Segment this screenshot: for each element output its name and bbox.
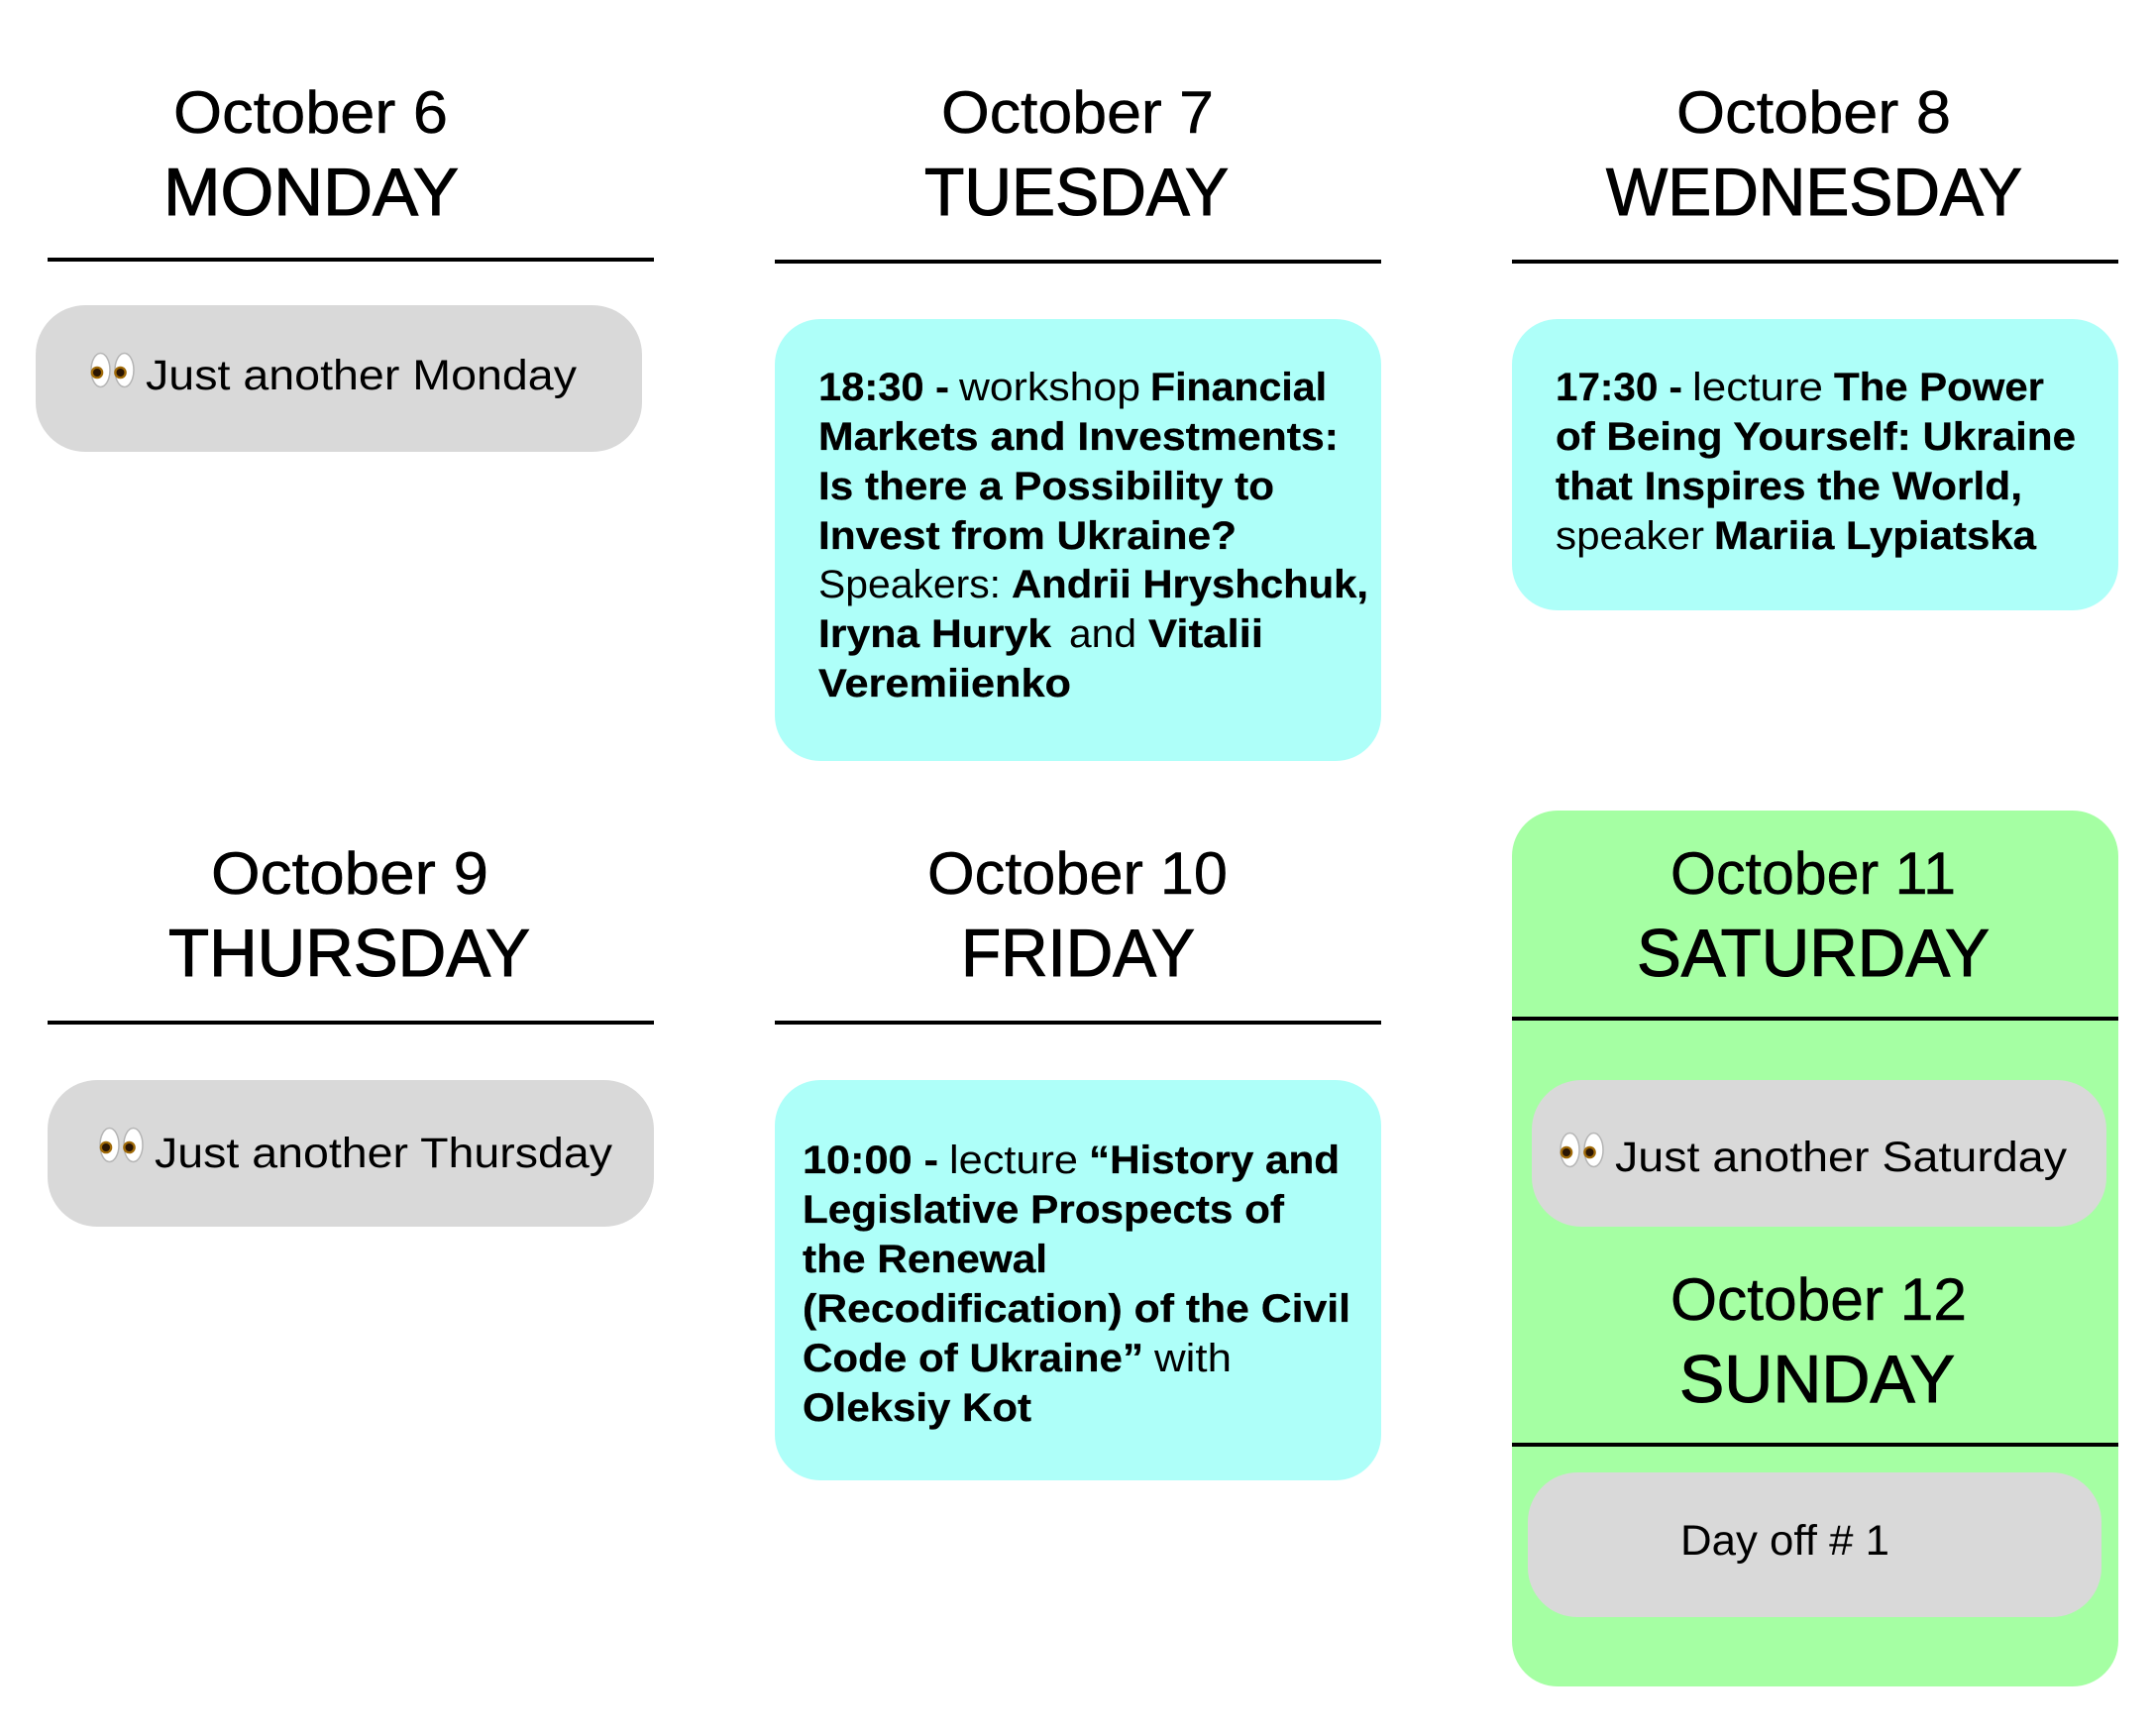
event card: workshop Financial Markets: Vitalii [1148, 612, 1263, 656]
icon: eyes [100, 1128, 143, 1161]
heading: October 7 Tuesday [924, 79, 1229, 230]
event card: lecture The Power of Being Yourself: lecture [1692, 366, 1823, 409]
event card: workshop Financial Markets: Invest from Ukraine? [818, 514, 1237, 558]
event card: workshop Financial Markets: Veremiienko [818, 662, 1071, 705]
event card: workshop Financial Markets: Andrii Hryshchuk, [1012, 563, 1368, 606]
heading: October 9 Thursday [168, 840, 530, 991]
heading: October 12 Sunday [1670, 1266, 1967, 1417]
pill: Just another Saturday: Just another Saturday [1615, 1134, 2068, 1181]
event card: lecture History and Legislative Prospects: (Recodification) of the Civil [803, 1287, 1350, 1331]
event card: lecture The Power of Being Yourself: Mariia Lypiatska [1714, 514, 2037, 558]
pill: Just another Monday: Just another Monday [146, 352, 578, 399]
heading: October 10 Friday: October 10 [927, 840, 1228, 907]
panel: weekend [1512, 811, 2118, 1686]
event card: lecture History and Legislative Prospects [775, 1080, 1381, 1480]
panel: Monday [36, 79, 654, 452]
event card: workshop Financial Markets [775, 319, 1381, 761]
event card: workshop Financial Markets: Iryna Huryk [818, 612, 1052, 656]
heading: October 10 Friday: FRIDAY [961, 916, 1195, 991]
event card: lecture The Power of Being Yourself: speaker [1556, 514, 1704, 558]
event card: workshop Financial Markets: and [1069, 612, 1136, 656]
event card: workshop Financial Markets: Is there a Possibility to [818, 465, 1274, 508]
heading: October 8 Wednesday: October 8 [1676, 79, 1951, 146]
heading: October 12 Sunday: October 12 [1670, 1266, 1967, 1333]
pill: Day off # 1: Day off # 1 [1680, 1517, 1889, 1565]
event card: workshop Financial Markets: workshop [958, 366, 1140, 409]
event card: lecture The Power of Being Yourself: of Being Yourself: Ukraine [1556, 415, 2076, 459]
heading: October 11 Saturday: SATURDAY [1637, 916, 1990, 991]
event card: workshop Financial Markets: Financial [1150, 366, 1327, 409]
event card: lecture The Power of Being Yourself: 17:30 - [1556, 366, 1682, 409]
event card: workshop Financial Markets: Markets and Investments: [818, 415, 1339, 459]
pill: Just another Thursday [48, 1080, 654, 1227]
panel: Thursday [48, 840, 654, 1227]
event card: lecture History and Legislative Prospects: “History and [1089, 1139, 1340, 1182]
event card: lecture The Power of Being Yourself: The Power [1834, 366, 2044, 409]
pill: Just another Monday [36, 305, 642, 452]
event card: lecture History and Legislative Prospects: with [1153, 1337, 1232, 1380]
heading: October 9 Thursday: THURSDAY [168, 916, 530, 991]
heading: October 7 Tuesday: October 7 [941, 79, 1214, 146]
pill: Just another Thursday: Just another Thursday [155, 1130, 613, 1177]
heading: October 8 Wednesday [1606, 79, 2022, 230]
event card: lecture History and Legislative Prospects: 10:00 - [803, 1139, 938, 1182]
event card: workshop Financial Markets: 18:30 - [818, 366, 949, 409]
heading: October 11 Saturday [1637, 840, 1990, 991]
heading: October 7 Tuesday: TUESDAY [924, 155, 1229, 230]
pill: Day off # 1 [1528, 1472, 2101, 1617]
heading: October 11 Saturday: October 11 [1670, 840, 1956, 907]
panel: Tuesday [775, 79, 1381, 761]
panel: Wednesday [1512, 79, 2118, 610]
event card: lecture History and Legislative Prospects: the Renewal [803, 1238, 1047, 1281]
heading: October 6 Monday [163, 79, 459, 230]
event card: workshop Financial Markets: Speakers: [818, 563, 1001, 606]
pill: Just another Saturday [1532, 1080, 2106, 1227]
heading: October 6 Monday: MONDAY [163, 155, 459, 230]
event card: lecture History and Legislative Prospects: Oleksiy Kot [803, 1386, 1031, 1430]
heading: October 12 Sunday: SUNDAY [1679, 1342, 1955, 1417]
event card: lecture History and Legislative Prospects: Legislative Prospects of [803, 1188, 1285, 1232]
event card: lecture The Power of Being Yourself: that Inspires the World, [1556, 465, 2022, 508]
heading: October 10 Friday [927, 840, 1228, 991]
icon: eyes [91, 353, 134, 386]
heading: October 9 Thursday: October 9 [211, 840, 488, 907]
heading: October 6 Monday: October 6 [173, 79, 448, 146]
event card: lecture The Power of Being Yourself [1512, 319, 2118, 610]
event card: lecture History and Legislative Prospects: lecture [949, 1139, 1078, 1182]
panel: Friday [775, 840, 1381, 1480]
heading: October 8 Wednesday: WEDNESDAY [1606, 155, 2022, 230]
icon: eyes [1561, 1134, 1603, 1167]
event card: lecture History and Legislative Prospects: Code of Ukraine” [803, 1337, 1143, 1380]
